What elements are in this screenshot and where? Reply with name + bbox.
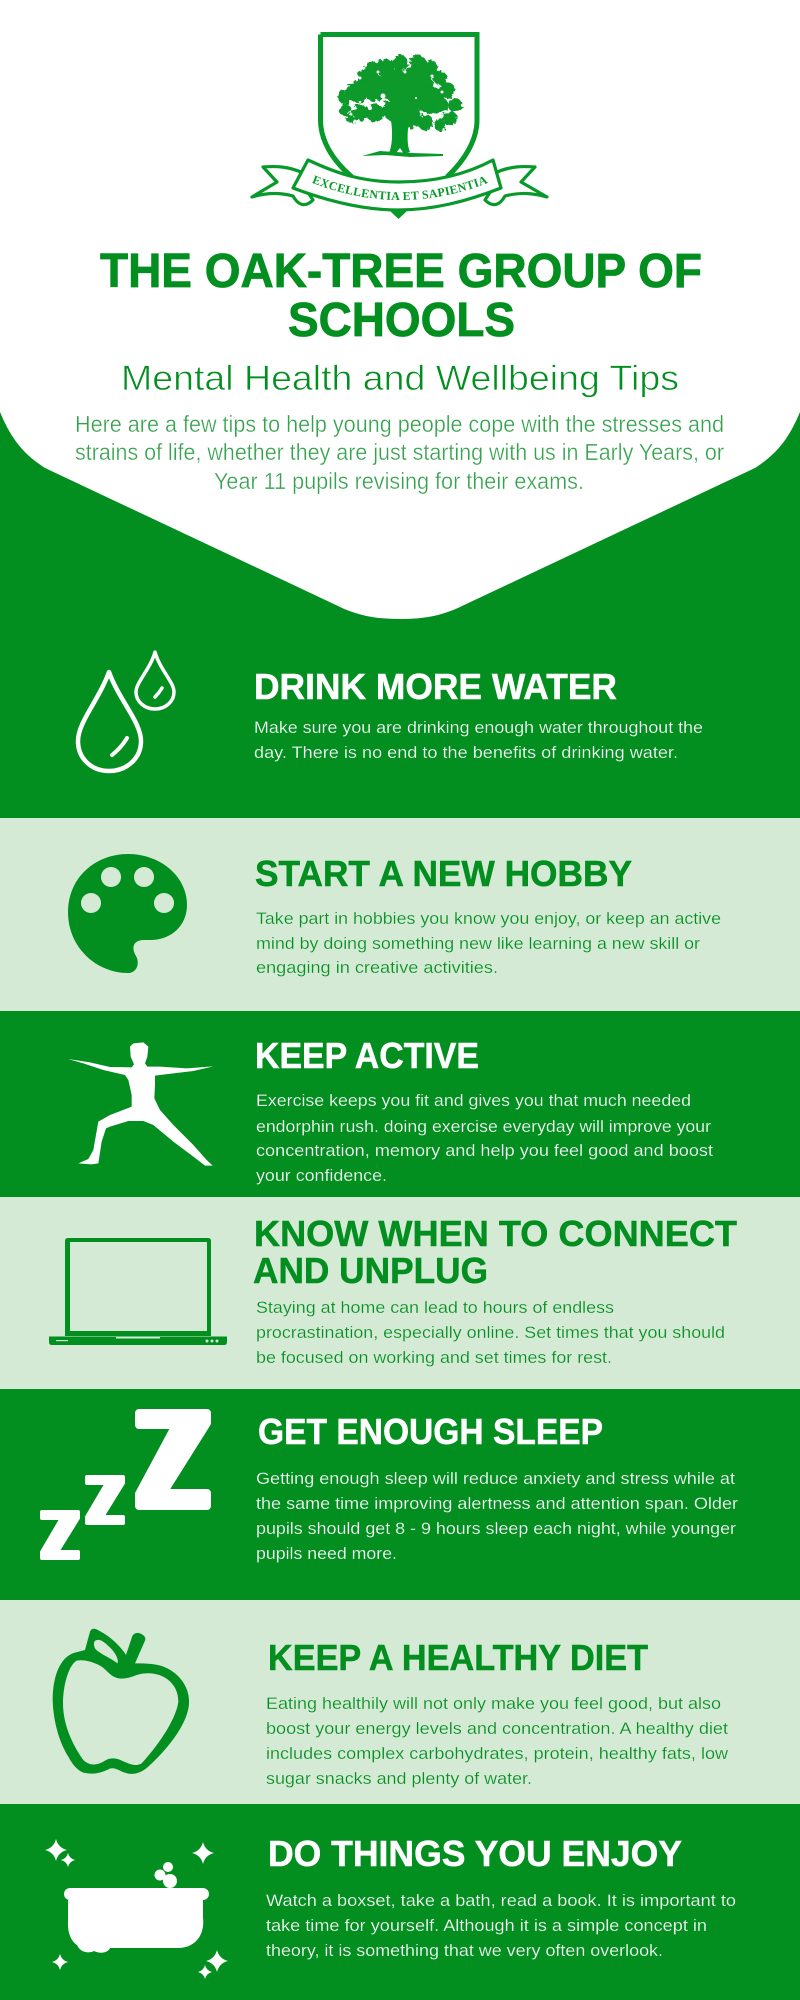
text: keep active: endorphin rush. doing exercise everyday will improve your [256,1118,712,1136]
text: keep active: your confidence. [256,1167,387,1185]
heading: know when to connect and unplug [253,1213,737,1291]
text: keep a healthy diet: Eating healthily will not only make you feel good, but also [266,1695,721,1713]
title: SCHOOLS [288,294,515,347]
heading: get enough sleep: GET ENOUGH SLEEP [258,1411,603,1452]
heading: keep a healthy diet: KEEP A HEALTHY DIET [268,1637,648,1678]
intro text: strains of life, whether they are just starting with us in Early Years, or [75,439,724,465]
text: drink more water [254,719,703,762]
icon: paint palette [68,854,187,973]
icon: water drops [78,652,174,771]
heading: know when to connect and unplug: KNOW WHEN TO CONNECT [254,1213,737,1254]
text: do things you enjoy: theory, it is something that we very often overlook. [266,1942,663,1960]
text: connect and unplug: be focused on working and set times for rest. [256,1349,612,1367]
text: keep a healthy diet: includes complex carbohydrates, protein, healthy fats, low [266,1745,728,1763]
icon: oak tree [338,55,462,157]
panel: header white shape [0,0,800,619]
heading: start a new hobby: START A NEW HOBBY [255,853,632,894]
ribbon banner [252,160,547,210]
text: keep a healthy diet [266,1695,728,1788]
text: keep a healthy diet: sugar snacks and plenty of water. [266,1770,532,1788]
text: keep a healthy diet: boost your energy levels and concentration. A healthy diet [266,1720,728,1738]
intro text [75,411,724,494]
logo: school crest [250,32,549,219]
text: keep active: concentration, memory and help you feel good and boost [256,1142,713,1160]
intro text: Here are a few tips to help young people cope with the stresses and [75,411,724,437]
text: start a new hobby: mind by doing something new like learning a new skill or [256,935,701,953]
heading: drink more water: DRINK MORE WATER [254,666,617,707]
text: start a new hobby [256,910,721,977]
icon: laptop [49,1238,227,1345]
title: THE OAK-TREE GROUP OF [100,245,702,298]
text: do things you enjoy [266,1892,736,1960]
subtitle: Mental Health and Wellbeing Tips [121,359,679,398]
text: keep active [256,1092,713,1185]
text: get enough sleep: the same time improving alertness and attention span. Older [256,1495,739,1513]
icon: apple [53,1629,189,1774]
icon: yoga figure [68,1042,213,1166]
text: connect and unplug: procrastination, especially online. Set times that you should [256,1324,725,1342]
text: get enough sleep: pupils need more. [256,1545,397,1563]
text: do things you enjoy: take time for yourself. Although it is a simple concept in [266,1917,707,1935]
panel: connect and unplug [0,1197,800,1389]
text: drink more water: Make sure you are drinking enough water throughout the [254,719,703,737]
text: get enough sleep: Getting enough sleep will reduce anxiety and stress while at [256,1470,735,1488]
ribbon motto: EXCELLENTIA ET SAPIENTIA [312,175,488,200]
text: connect and unplug [256,1299,725,1367]
text: keep active: Exercise keeps you fit and gives you that much needed [256,1092,691,1110]
panel: start a new hobby [0,818,800,1011]
text: start a new hobby: Take part in hobbies you know you enjoy, or keep an active [256,910,721,928]
title [100,245,702,347]
intro text: Year 11 pupils revising for their exams. [214,468,584,494]
heading: do things you enjoy: DO THINGS YOU ENJOY [268,1833,682,1874]
icon: sleeping z letters [42,1413,207,1558]
text: drink more water: day. There is no end to the benefits of drinking water. [254,744,678,762]
text: get enough sleep: pupils should get 8 - 9 hours sleep each night, while younger [256,1520,737,1538]
text: start a new hobby: engaging in creative activities. [256,959,498,977]
heading: know when to connect and unplug: AND UNPLUG [253,1250,488,1291]
crest shield [320,34,477,177]
text: connect and unplug: Staying at home can lead to hours of endless [256,1299,614,1317]
panel: healthy diet [0,1600,800,1804]
icon: bubble bath with sparkles [45,1839,228,1979]
ribbon tip [389,210,408,219]
heading: keep active: KEEP ACTIVE [255,1035,479,1076]
text: do things you enjoy: Watch a boxset, take a bath, read a book. It is important to [266,1892,736,1910]
text: get enough sleep [256,1470,739,1563]
